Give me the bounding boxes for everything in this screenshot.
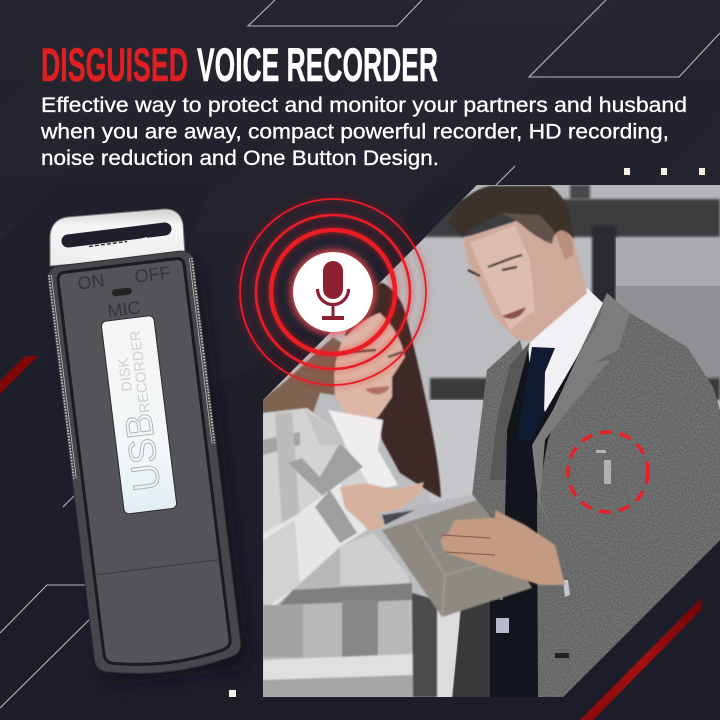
seam — [96, 560, 218, 575]
switch labels — [76, 262, 175, 325]
woman sleeve — [263, 483, 367, 617]
voice signal rings and mic icon — [240, 199, 426, 385]
rings — [240, 199, 426, 385]
man vest — [490, 345, 580, 697]
description text — [40, 94, 687, 170]
woman collar — [288, 443, 363, 500]
man hair — [448, 186, 574, 242]
red slash right — [580, 598, 701, 720]
man coat — [452, 288, 720, 697]
usb label panel — [101, 315, 177, 514]
disc glow — [290, 249, 376, 335]
tablet — [377, 495, 532, 617]
usb voice recorder device — [46, 250, 243, 680]
switch labels: OFF — [133, 262, 172, 287]
dots — [229, 168, 705, 697]
woman hair right — [345, 283, 441, 498]
title: VOICE RECORDER — [197, 38, 438, 91]
switch labels: MIC — [106, 297, 142, 321]
usb label panel: DISK — [116, 356, 136, 392]
woman shirt — [328, 410, 398, 492]
man head — [448, 186, 587, 342]
woman — [262, 283, 441, 697]
icon: microphone — [318, 261, 348, 320]
lower coat button — [555, 653, 569, 658]
woman upper coat — [263, 408, 372, 533]
mic slot — [112, 287, 132, 297]
woman face — [334, 313, 405, 420]
metal clip — [50, 209, 185, 266]
cuff — [563, 580, 570, 597]
photo: couple — [262, 185, 720, 697]
woman hair left — [262, 337, 345, 414]
chrome side edges — [49, 258, 217, 479]
recorder body — [46, 250, 243, 680]
man hand — [440, 510, 565, 585]
photo background: building — [263, 185, 720, 697]
body inner well — [57, 258, 232, 670]
man shirt — [528, 288, 603, 412]
man eyes and mouth — [468, 255, 522, 276]
usb label panel: USB — [118, 411, 169, 493]
rings glow — [240, 199, 426, 385]
usb label panel: RECORDER — [128, 330, 154, 414]
man lapel — [532, 293, 630, 530]
man tie — [517, 347, 555, 440]
woman lower coat plaid — [276, 548, 396, 606]
red slash left — [0, 356, 38, 394]
description text: when you are away, compact powerful recorder, HD recording, — [40, 120, 669, 144]
dashed highlight circle — [568, 432, 648, 512]
description text: Effective way to protect and monitor your partners and husband — [41, 94, 687, 117]
title: DISGUISED — [41, 38, 188, 91]
white disc — [293, 252, 373, 332]
woman hand — [340, 482, 424, 532]
device shadow — [55, 257, 252, 686]
switch labels: ON — [76, 271, 106, 294]
coat tweed texture — [452, 293, 720, 697]
description text: noise reduction and One Button Design. — [41, 147, 439, 170]
title — [41, 38, 438, 91]
man pocket and recorder — [596, 450, 606, 453]
